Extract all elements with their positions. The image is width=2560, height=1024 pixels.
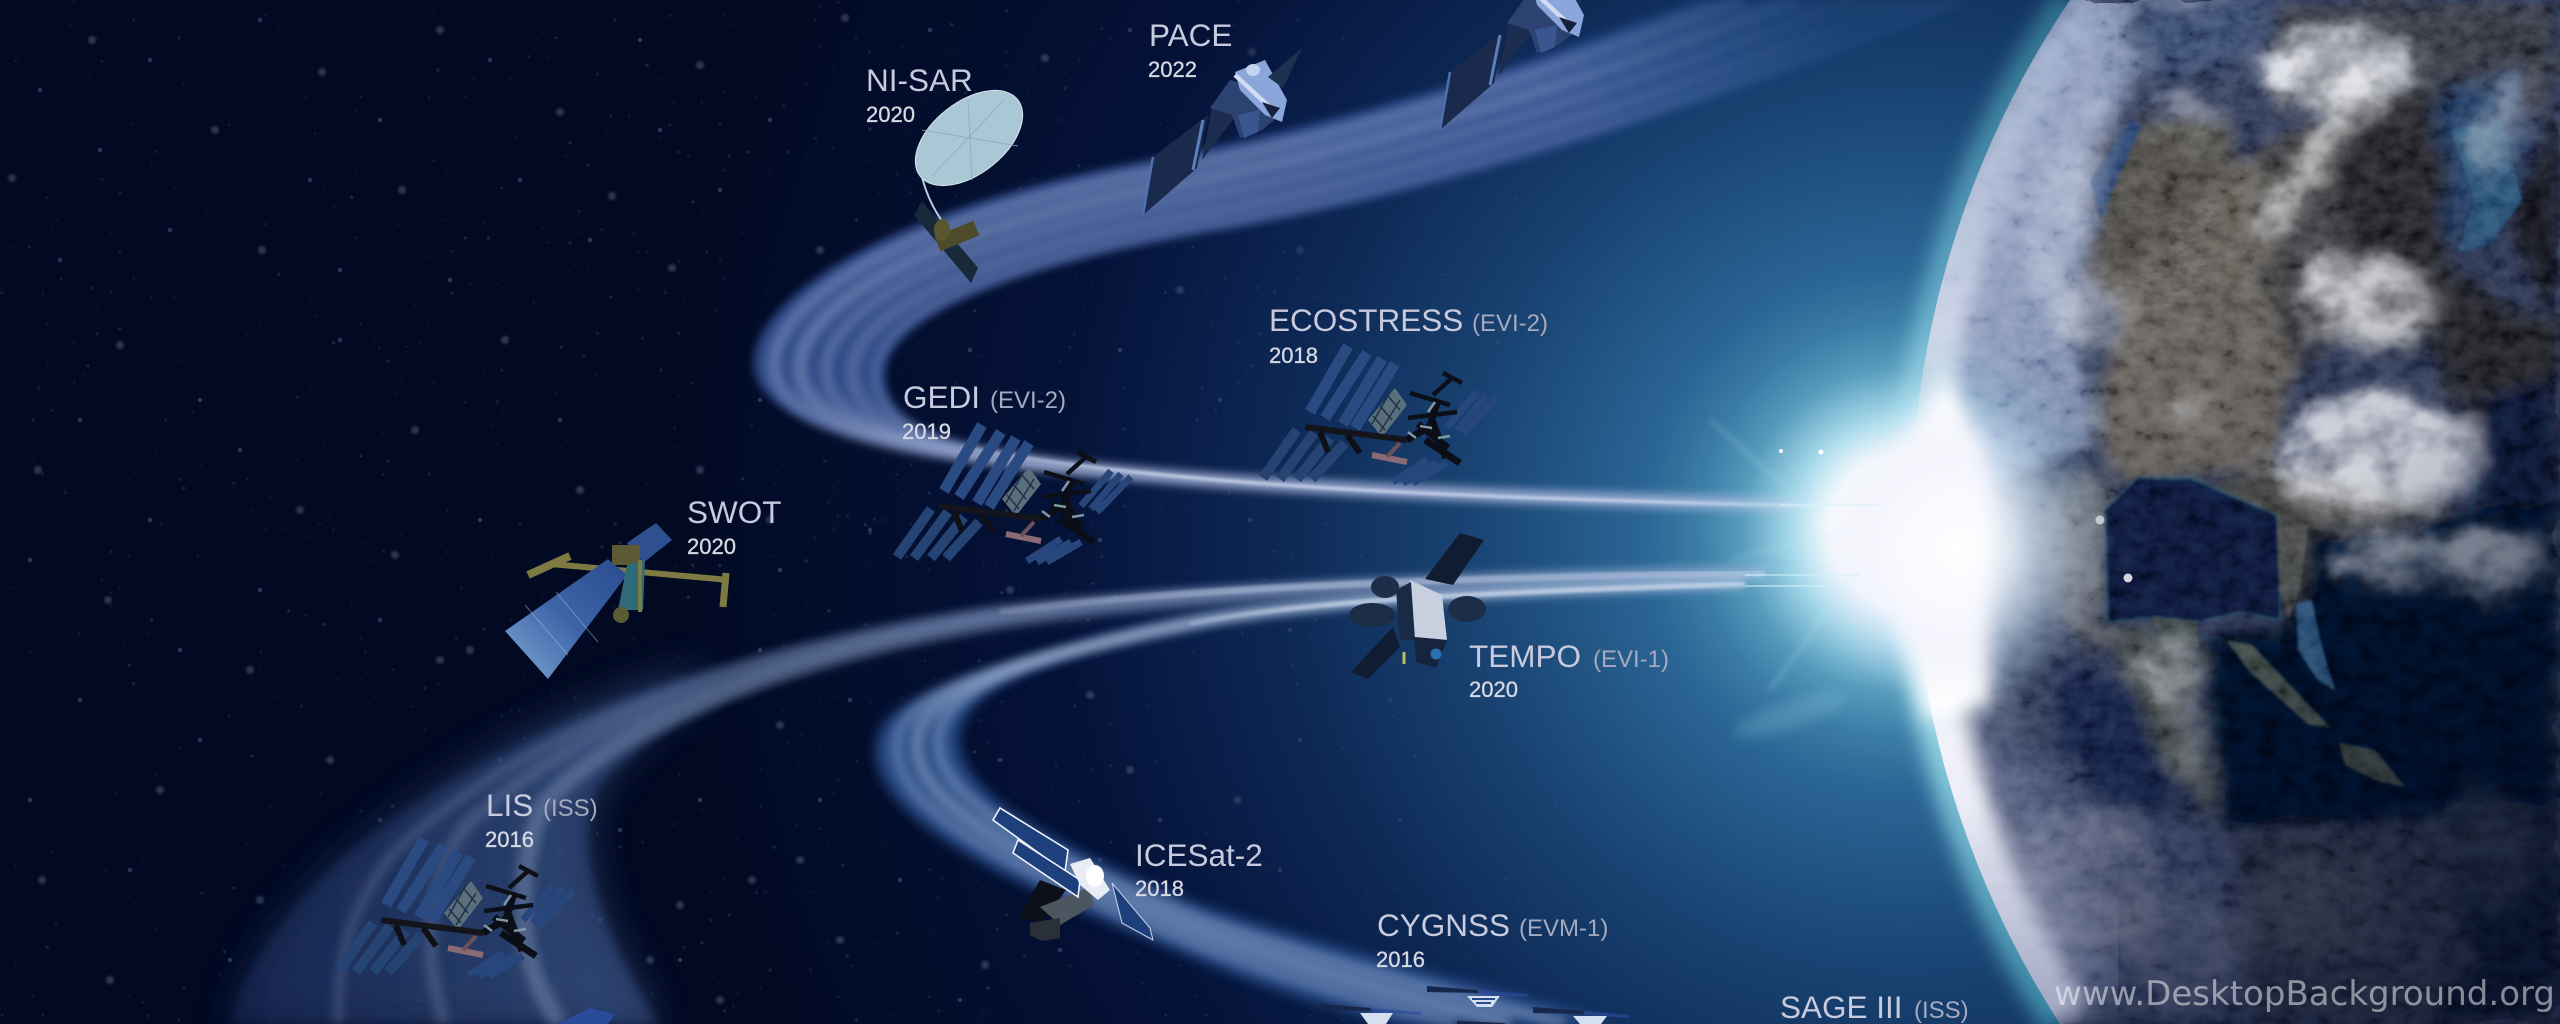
atmosphere halo <box>1911 0 2070 1024</box>
icon: space station <box>897 425 1131 562</box>
label: CYGNSS: 2016 <box>1376 947 1425 972</box>
label: GEDI: 2019 <box>902 419 951 444</box>
label: PACE: 2022 <box>1148 57 1197 82</box>
continents and oceans <box>1900 0 2560 1024</box>
label: LIS: (ISS) <box>543 795 598 822</box>
clouds <box>1995 28 2547 1005</box>
label: SAGE III: (ISS) <box>1914 997 1969 1024</box>
satellite: NI-SAR <box>866 62 1040 283</box>
satellite: PACE <box>1143 17 1302 215</box>
satellite: TEMPO <box>1349 533 1669 702</box>
label: ECOSTRESS: (EVI-2) <box>1472 310 1548 337</box>
orbit ribbon: upper path (NI-SAR, PACE, GEDI) <box>754 0 1980 506</box>
label: ECOSTRESS: ECOSTRESS <box>1269 302 1463 338</box>
icon: PACE spacecraft <box>1143 48 1302 215</box>
label: ICESat-2: ICESat-2 <box>1135 837 1263 873</box>
watermark: www.DesktopBackground.org <box>2054 974 2555 1014</box>
icon: ICESat-2 spacecraft <box>993 808 1153 941</box>
label: NI-SAR: NI-SAR <box>866 62 973 98</box>
label: GEDI: (EVI-2) <box>990 387 1066 414</box>
label: SWOT <box>687 494 782 559</box>
star field <box>0 0 1584 1022</box>
label: LIS: LIS <box>486 787 533 823</box>
satellite: ICESat-2 <box>993 808 1263 941</box>
label: CYGNSS: (EVM-1) <box>1519 915 1608 942</box>
icon: partial solar panel at bottom edge <box>557 1008 615 1024</box>
earth <box>1900 0 2560 1024</box>
label: TEMPO <box>1469 638 1669 702</box>
label: SWOT: SWOT <box>687 494 782 530</box>
label: LIS <box>485 787 598 852</box>
icon: SWOT spacecraft <box>505 523 729 679</box>
bright limb crescent <box>1911 0 2070 1024</box>
icon: unlabelled spacecraft at top edge <box>1440 0 1599 130</box>
label: NI-SAR: 2020 <box>866 102 915 127</box>
label: GEDI <box>902 379 1066 444</box>
label: PACE: PACE <box>1149 17 1232 53</box>
satellite: GEDI <box>897 379 1131 562</box>
satellite: ECOSTRESS <box>1263 302 1548 483</box>
icon: CYGNSS constellation <box>1320 986 1630 1024</box>
label: PACE <box>1148 17 1232 82</box>
hazy limb on the globe <box>1911 0 2070 1024</box>
label: LIS: 2016 <box>485 827 534 852</box>
label: TEMPO: (EVI-1) <box>1593 646 1669 673</box>
label: SAGE III: SAGE III <box>1780 989 1903 1024</box>
icon: TEMPO geostationary host <box>1349 533 1486 679</box>
label: GEDI: GEDI <box>903 379 980 415</box>
satellite: CYGNSS <box>1320 907 1630 1024</box>
label: CYGNSS <box>1376 907 1608 972</box>
icon: space station <box>1263 346 1497 483</box>
label: SAGE III <box>1780 989 1969 1024</box>
gulf, florida and islands <box>2090 120 2522 787</box>
label: ECOSTRESS: 2018 <box>1269 343 1318 368</box>
label: ICESat-2 <box>1135 837 1263 901</box>
label: TEMPO: TEMPO <box>1469 638 1581 674</box>
label: TEMPO: 2020 <box>1469 677 1518 702</box>
satellite: LIS <box>339 787 598 976</box>
icon: NI-SAR reflector dish and bus <box>898 71 1040 283</box>
label: ECOSTRESS <box>1269 302 1548 368</box>
label: NI-SAR <box>866 62 973 127</box>
satellite: SWOT <box>505 494 782 679</box>
orbit ribbon: lower path (TEMPO, ICESat-2, CYGNSS) <box>876 582 1745 1024</box>
label: SWOT: 2020 <box>687 534 736 559</box>
label: CYGNSS: CYGNSS <box>1377 907 1510 943</box>
icon: space station <box>339 839 573 976</box>
label: ICESat-2: 2018 <box>1135 876 1184 901</box>
orbit ribbon: lower-left path (SWOT, LIS) <box>232 573 1765 1024</box>
sun flare <box>1695 280 2115 780</box>
